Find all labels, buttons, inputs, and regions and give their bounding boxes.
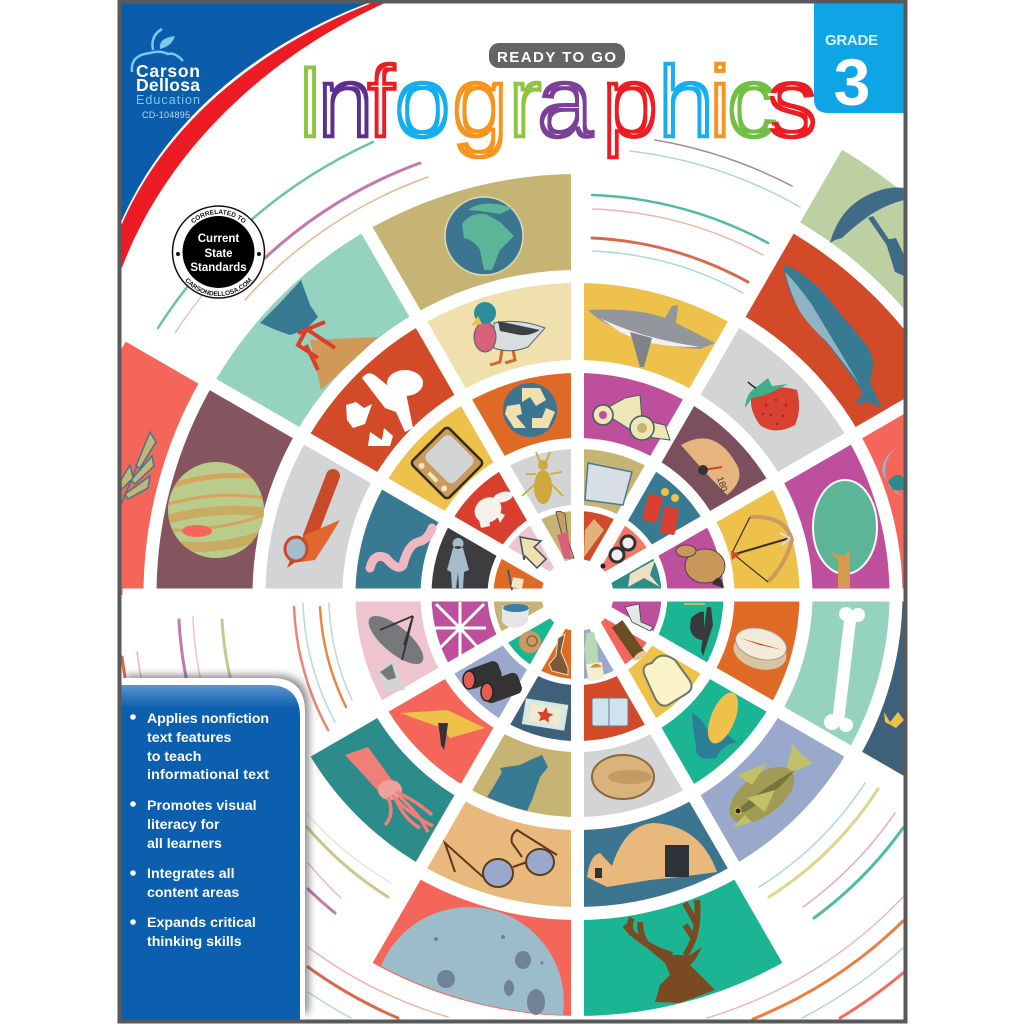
feature panel: [121, 675, 309, 1020]
badge centre text: Standards: [190, 262, 247, 274]
icon: shark: [588, 305, 715, 367]
banner red swoosh: [121, 3, 385, 270]
icon: recycling symbol: [503, 383, 557, 437]
icon: trilobite: [592, 755, 654, 799]
icon: fern: [121, 432, 156, 505]
bullet 2: [130, 798, 257, 852]
logo apple outline: [132, 29, 183, 72]
title: f: [367, 45, 396, 159]
title: n: [317, 45, 374, 159]
icon: open book: [592, 698, 628, 726]
icon: speed gauge: 180: [715, 475, 730, 493]
icon: deer: [625, 900, 715, 1003]
icon: rocket plane: [285, 476, 340, 568]
icon: strawberry: [745, 378, 799, 430]
icon: earthworm: [370, 528, 432, 568]
bullet 4: thinking skills: [147, 934, 242, 950]
icon: fireworks: [642, 488, 679, 535]
title: o: [394, 45, 451, 159]
book cover page: [122, 139, 904, 1020]
publisher logo: Education: [136, 93, 200, 107]
corner banner: [121, 3, 385, 270]
icon: human figure: [447, 538, 469, 589]
badge ring text bottom: CARSONDELLOSA.COM: [186, 278, 252, 296]
grade box: [814, 3, 904, 119]
icon: earth: [445, 197, 523, 275]
icon: tractor: [593, 395, 670, 440]
title: i: [709, 45, 731, 159]
icon: beaver: [676, 545, 725, 588]
grade box: GRADE: [825, 32, 878, 49]
bullet 1: [130, 711, 269, 783]
standards badge: [172, 205, 266, 299]
icon: satellite dish: [362, 608, 430, 692]
icon: polar bear: [474, 492, 513, 528]
bullet 3: content areas: [147, 885, 239, 901]
banner white keyline: [121, 3, 372, 226]
icon: squid: [345, 747, 433, 832]
publisher logo: Dellosa: [136, 75, 200, 95]
icon: bottle: [584, 632, 604, 681]
ring 2 sectors: [432, 449, 724, 741]
bullet 1: Applies nonfiction: [147, 711, 269, 727]
publisher logo: [132, 29, 200, 120]
title: I: [296, 45, 324, 159]
icon: moon: [381, 907, 564, 1015]
title: h: [658, 45, 714, 159]
bullet 2: literacy for: [147, 817, 220, 833]
icon: insect: [522, 452, 563, 504]
ring 3 sectors: [356, 373, 800, 817]
icon: wooden log: [612, 620, 647, 662]
bullet 4: [130, 915, 256, 950]
icon: Jupiter planet: [165, 462, 265, 558]
icon: small creature on dark sector: [884, 712, 904, 728]
series label pill: [489, 43, 625, 68]
icon: crest: [584, 519, 604, 557]
icon: eyes: [600, 536, 635, 568]
icon: spoke pattern: [433, 602, 486, 664]
ring 4 sectors: [265, 247, 926, 943]
icon: ticket: [522, 699, 568, 730]
title: r: [508, 45, 542, 159]
icon: earthen hut: [587, 823, 717, 887]
icon: speed gauge: [681, 438, 739, 495]
icon: paintbrush: [625, 604, 653, 631]
title: g: [452, 45, 508, 159]
icon: corn: [692, 688, 744, 759]
icon: dog bone shape: [628, 560, 660, 587]
ring 1 sectors: [494, 511, 662, 679]
icon: television: [410, 426, 484, 500]
icon: volcano: [260, 280, 378, 390]
icon: duck: [471, 302, 545, 365]
bullet 1: informational text: [147, 767, 269, 783]
icon: spectacles: [445, 830, 557, 887]
bullet 4: Expands critical: [147, 915, 256, 931]
icon: white silhouette character: [346, 370, 423, 446]
bullet 1: to teach: [147, 749, 201, 765]
badge centre text: State: [204, 248, 233, 260]
icon: bone: [824, 607, 865, 732]
icon: tri-corner hat: [684, 604, 713, 656]
radial wheel of coloured sectors: [122, 4, 904, 1020]
ring 6 sectors: [121, 146, 905, 595]
badge centre text: Current: [198, 233, 239, 245]
series label pill: READY TO GO: [497, 49, 616, 66]
icon: whale: [783, 265, 882, 408]
icon: slice of bread: [644, 656, 692, 706]
title: c: [726, 45, 778, 159]
bullet 2: all learners: [147, 836, 222, 852]
title: s: [766, 45, 818, 159]
ring 5 sectors: [156, 125, 1024, 1024]
bullet 3: Integrates all: [147, 866, 235, 882]
bullet 1: text features: [147, 730, 231, 746]
icon: tree: [813, 480, 877, 588]
icon: umbrella: [830, 188, 904, 276]
icon: hang glider: [400, 710, 485, 750]
icon: arrow cursor: [520, 537, 546, 568]
bullet 3: [130, 866, 239, 901]
icon: ammonite shell: [519, 631, 541, 653]
icon: fish: [720, 744, 813, 834]
icon: shirt: [585, 463, 632, 505]
publisher logo: CD-104895: [142, 110, 190, 120]
icon: quill and cone: [549, 634, 568, 675]
badge ring text top: CORRELATED TO: [191, 210, 246, 223]
icon: howling wolf: [487, 755, 548, 811]
icon: paper roll: [502, 604, 529, 628]
decorative concentric arc lines: [122, 140, 903, 1019]
icon: planet globe: [882, 444, 904, 497]
icon: ladder and paper: [508, 570, 524, 590]
title: p: [602, 45, 658, 159]
title: a: [537, 45, 594, 159]
banner blue field: [121, 3, 368, 222]
icon: bow and arrow: [731, 517, 792, 582]
bullet 2: Promotes visual: [147, 798, 257, 814]
icon: binoculars: [463, 659, 524, 705]
icon: compass: [730, 623, 790, 675]
cover frame: [120, 2, 906, 1022]
grade box: 3: [834, 45, 870, 119]
logo wordmark: Carson: [136, 61, 200, 81]
icon: test tube: [556, 511, 574, 559]
